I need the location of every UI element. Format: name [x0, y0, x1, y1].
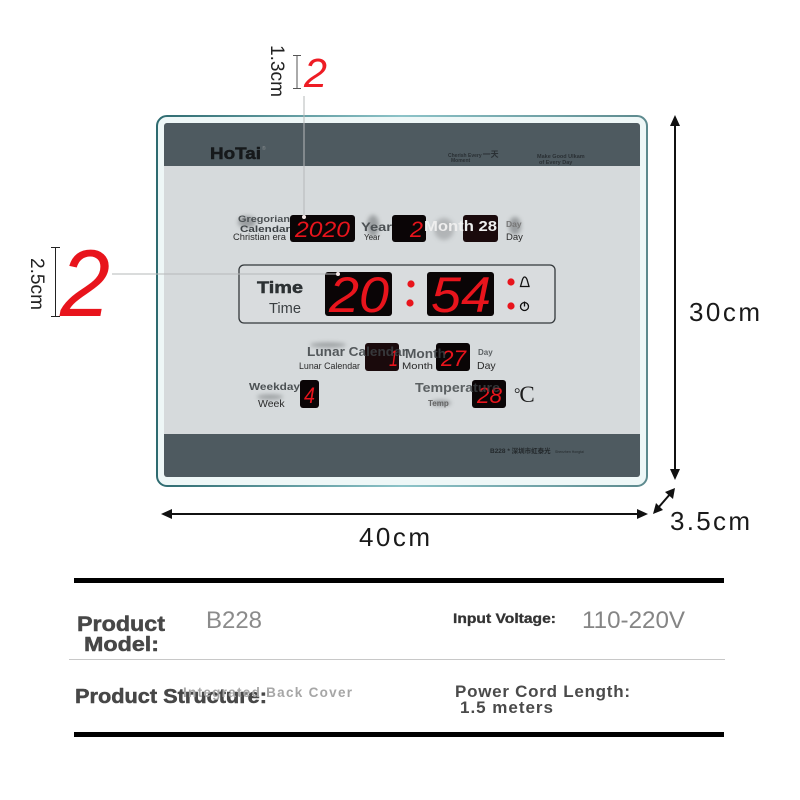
spec: product model: Product	[77, 613, 165, 636]
display: weekday 4	[300, 380, 319, 408]
label: Month	[402, 346, 446, 372]
dimension: width 40cm	[161, 509, 648, 552]
label: Lunar Calendar: Lunar Calendar	[299, 361, 360, 372]
display: lunar month: 1	[389, 346, 398, 371]
display: temperature 28: 28	[476, 383, 503, 408]
label: Month: Month	[405, 346, 446, 361]
top rule	[74, 578, 724, 583]
label: Month overlapping day display	[424, 215, 498, 242]
unit: Celsius: C	[519, 382, 535, 407]
dimension bracket	[293, 56, 301, 88]
alarm indicator	[507, 277, 529, 286]
display: year 2020	[290, 215, 355, 242]
outer glass frame	[157, 116, 647, 486]
unit: Celsius: °	[514, 386, 520, 403]
label: Month overlapping day display: Month 28	[424, 219, 497, 235]
label: Day: Day	[506, 219, 522, 229]
display: hours 20: 20	[328, 267, 389, 323]
callout: 2.5cm digit height	[26, 231, 340, 337]
sample digit: 2	[303, 50, 327, 96]
spec: product structure: Product Structure:	[75, 686, 267, 708]
dimension bracket	[51, 248, 60, 316]
label: Weekday	[249, 382, 301, 410]
display: temperature 28	[472, 380, 506, 408]
label: 3.5cm	[670, 506, 750, 536]
brand logo: HoTai	[210, 144, 261, 163]
label: Time	[257, 278, 303, 317]
spec: product model: B228	[206, 607, 262, 634]
label: Weekday: Week	[258, 398, 285, 410]
spec: input voltage: 110-220V	[582, 607, 685, 634]
top band	[164, 123, 640, 166]
spec: input voltage: Input Voltage:	[453, 611, 556, 626]
dimension label: 2.5cm	[26, 258, 47, 310]
slogan left: Cherish Every一天	[448, 150, 499, 159]
label: lunar Day	[477, 348, 496, 372]
dimension: height 30cm	[670, 115, 760, 480]
label: Time: Time	[269, 300, 301, 317]
leader dot	[302, 215, 306, 219]
label: Lunar Calendar	[299, 344, 407, 372]
display: minutes 54: 54	[431, 267, 491, 323]
label: Gregorian Calendar: Christian era	[233, 232, 286, 242]
label: Time: Time	[257, 278, 303, 297]
leader line	[112, 273, 338, 275]
display: lunar month	[365, 343, 399, 371]
label: Temperature	[415, 380, 500, 408]
spec: input voltage	[453, 607, 685, 634]
footer small print: Shenzhen Hongtai	[555, 450, 584, 454]
slogan right: of Every Day	[539, 160, 573, 166]
callout: 1.3cm digit height	[266, 45, 327, 219]
label: lunar Day: Day	[477, 360, 496, 372]
label: Day	[506, 219, 523, 243]
label: Year: Year	[361, 220, 392, 234]
display: month 2: 2	[409, 217, 423, 242]
clock body	[157, 116, 647, 486]
label: 30cm	[689, 297, 760, 327]
arrow	[653, 488, 675, 514]
label: lunar Day: Day	[478, 348, 493, 357]
display: year 2020: 2020	[294, 217, 351, 242]
dimension: depth 3.5cm	[653, 488, 750, 536]
label: Temperature: Temperature	[415, 380, 500, 395]
specification table	[69, 578, 725, 737]
middle rule	[69, 659, 725, 660]
bottom rule	[74, 732, 724, 737]
spec: product model	[77, 607, 262, 656]
bottom band	[164, 434, 640, 477]
sample digit: 2	[59, 231, 110, 337]
face panel	[164, 123, 640, 477]
label: Day: Day	[506, 232, 523, 243]
label: 40cm	[359, 522, 430, 552]
power indicator	[507, 302, 528, 310]
spec: product structure: Integrated Back Cover	[183, 685, 353, 700]
footer model text: B228 * 深圳市虹泰光	[490, 446, 551, 455]
label: Lunar Calendar: Lunar Calendar	[307, 344, 407, 359]
label: Month: Month	[402, 361, 433, 372]
leader dot	[336, 272, 340, 276]
display: month 2	[392, 215, 426, 242]
colon dots	[406, 280, 415, 307]
lunar row	[299, 343, 496, 372]
display: weekday 4: 4	[304, 383, 315, 408]
time panel	[239, 265, 555, 323]
label: Year: Year	[364, 233, 380, 242]
date row	[233, 214, 523, 243]
slogan right: Make Good Ulkam	[537, 154, 585, 160]
weekday and temperature row	[249, 380, 535, 410]
label: Gregorian Calendar: Calendar	[240, 224, 290, 235]
label: Gregorian Calendar: Gregorian	[238, 214, 290, 225]
brand logo: ®	[262, 145, 266, 152]
display: lunar day 27: 27	[440, 346, 467, 371]
label: Gregorian Calendar	[233, 214, 290, 242]
leader line	[303, 96, 305, 218]
spec: product model: Model:	[84, 634, 159, 656]
arrow	[161, 509, 648, 519]
spec: product structure	[75, 685, 353, 708]
spec: power cord length: 1.5 meters	[460, 698, 553, 717]
spec: power cord length: Power Cord Length:	[455, 682, 630, 701]
spec: power cord length	[455, 682, 630, 717]
arrow	[670, 115, 680, 480]
dimension label: 1.3cm	[266, 45, 287, 97]
display: lunar day 27	[436, 343, 470, 371]
label: Weekday: Weekday	[249, 382, 301, 393]
slogan left: Moment	[451, 158, 470, 164]
label: Temperature: Temp	[428, 399, 449, 408]
label: Year	[361, 220, 392, 242]
